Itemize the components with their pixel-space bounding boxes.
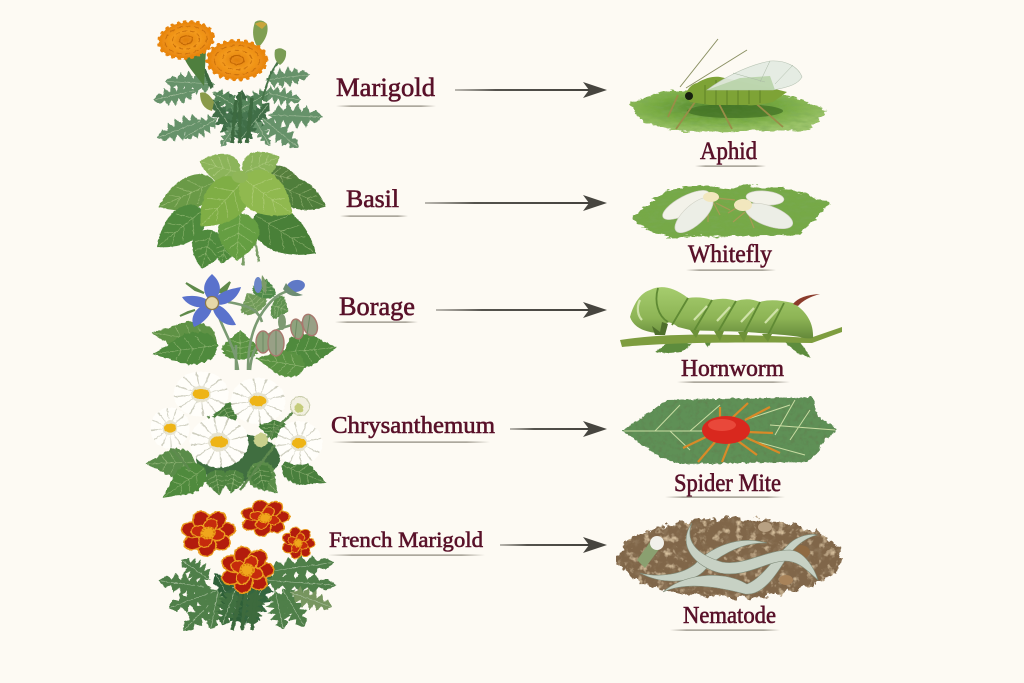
label: Whitefly: Whitefly [688,241,772,268]
leaf [632,185,830,237]
foliage [151,60,323,157]
body [630,287,813,338]
plant: basil [146,143,332,273]
pest: whitefly [632,185,830,238]
left fly [659,185,735,238]
mite [683,403,780,462]
insect [668,39,802,129]
clods [758,522,810,585]
soil [618,518,842,598]
front leaves [186,143,305,262]
calyx and buds [182,20,286,111]
veins [624,400,835,455]
hairy buds [256,312,320,356]
prolegs [652,322,772,342]
label: Spider Mite: Spider Mite [674,470,781,497]
pest: hornworm [620,287,842,358]
arrow: french marigold to nematode [500,537,607,553]
label: French Marigold: French Marigold [329,527,483,552]
plant: french marigold [157,497,338,640]
label: Aphid: Aphid [700,138,757,165]
arrow: marigold to aphid [455,82,607,98]
leaves [149,275,338,380]
pest: aphid [630,39,827,132]
arrow: chrysanthemum to spider mite [510,421,607,437]
label: Hornworm: Hornworm [681,356,784,382]
segment markings [656,288,784,335]
plant: marigold [151,19,323,157]
pest: nematode [618,518,842,598]
pest: spider mite [622,397,838,464]
flowers [156,19,266,79]
stem [620,327,842,347]
label: Chrysanthemum: Chrysanthemum [331,413,495,439]
flowers [175,497,315,595]
stems [216,288,305,370]
leaf [622,397,838,464]
plant: borage [149,274,338,380]
horn [793,294,820,306]
worms [640,523,818,594]
flowers [151,372,322,467]
right fly [728,189,796,234]
label: Borage: Borage [339,292,415,321]
arrow: basil to whitefly [425,195,607,211]
label: Nematode: Nematode [683,603,776,629]
leaves [145,397,331,510]
shadow [687,104,783,118]
cocoon [637,536,664,568]
label: Basil: Basil [346,184,399,213]
arrow: borage to hornworm [436,302,607,318]
plant: chrysanthemum [145,372,331,510]
blue flower [180,274,241,327]
leaves below [655,338,811,358]
leaves [157,550,338,640]
label: Marigold: Marigold [336,73,435,102]
label: Basil [340,184,408,217]
leaf [630,90,827,132]
back leaves [146,163,332,273]
blue buds [254,275,306,296]
